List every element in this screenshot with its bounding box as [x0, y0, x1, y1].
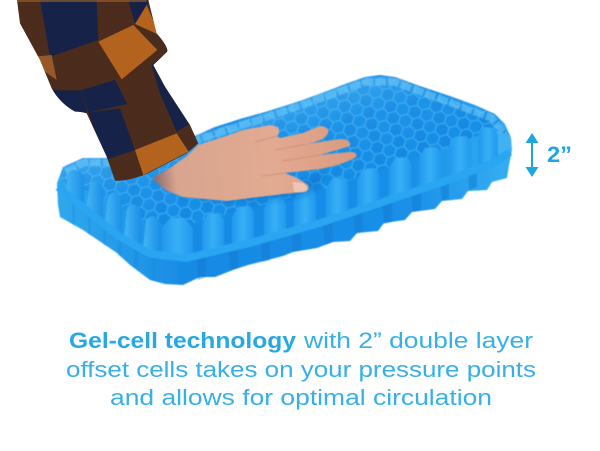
- hand shape: [152, 125, 356, 201]
- orange check: [38, 55, 57, 80]
- lower cell grooves: [196, 168, 477, 280]
- cell walls, long front edge: [162, 127, 498, 258]
- right corner wall: [487, 130, 512, 165]
- height label: 2”: [547, 142, 572, 167]
- far rim translucent band: [66, 82, 505, 172]
- fabric weave: [40, 6, 186, 174]
- cushion rim: [58, 152, 510, 258]
- navy check: [152, 55, 167, 93]
- left lower wall stripes: [72, 200, 156, 281]
- lower arrowhead: [526, 167, 538, 177]
- height dimension arrow: [526, 133, 538, 177]
- sleeve base: [13, 0, 203, 183]
- honeycomb top surface: [60, 77, 510, 225]
- navy check: [128, 0, 150, 24]
- navy check: [50, 90, 87, 113]
- navy check: [88, 108, 135, 160]
- hand: [152, 125, 356, 201]
- top edge band: [13, 0, 147, 2]
- caption line 2: offset cells takes on your pressure points: [66, 357, 536, 382]
- plaid shirt sleeve: [13, 0, 203, 183]
- hand shadow: [165, 170, 330, 202]
- finger creases: [255, 136, 320, 176]
- navy check: [160, 88, 190, 132]
- orange check: [135, 5, 159, 35]
- gel cushion: [57, 75, 512, 285]
- caption line 1 bold: Gel-cell technology: [69, 328, 297, 353]
- cell walls, left front edge: [66, 170, 160, 254]
- caption: [66, 328, 536, 410]
- caption line 3: and allows for optimal circulation: [110, 385, 492, 410]
- shaft: [531, 141, 533, 169]
- upper arrowhead: [526, 133, 538, 143]
- cushion body: [57, 75, 512, 285]
- top surface far edge highlight: [60, 77, 510, 225]
- orange check: [135, 133, 189, 175]
- orange check: [98, 25, 157, 79]
- navy check: [40, 0, 98, 57]
- navy check: [80, 80, 127, 113]
- thumb nail: [293, 182, 307, 192]
- caption line 1 regular: with 2” double layer: [303, 328, 534, 353]
